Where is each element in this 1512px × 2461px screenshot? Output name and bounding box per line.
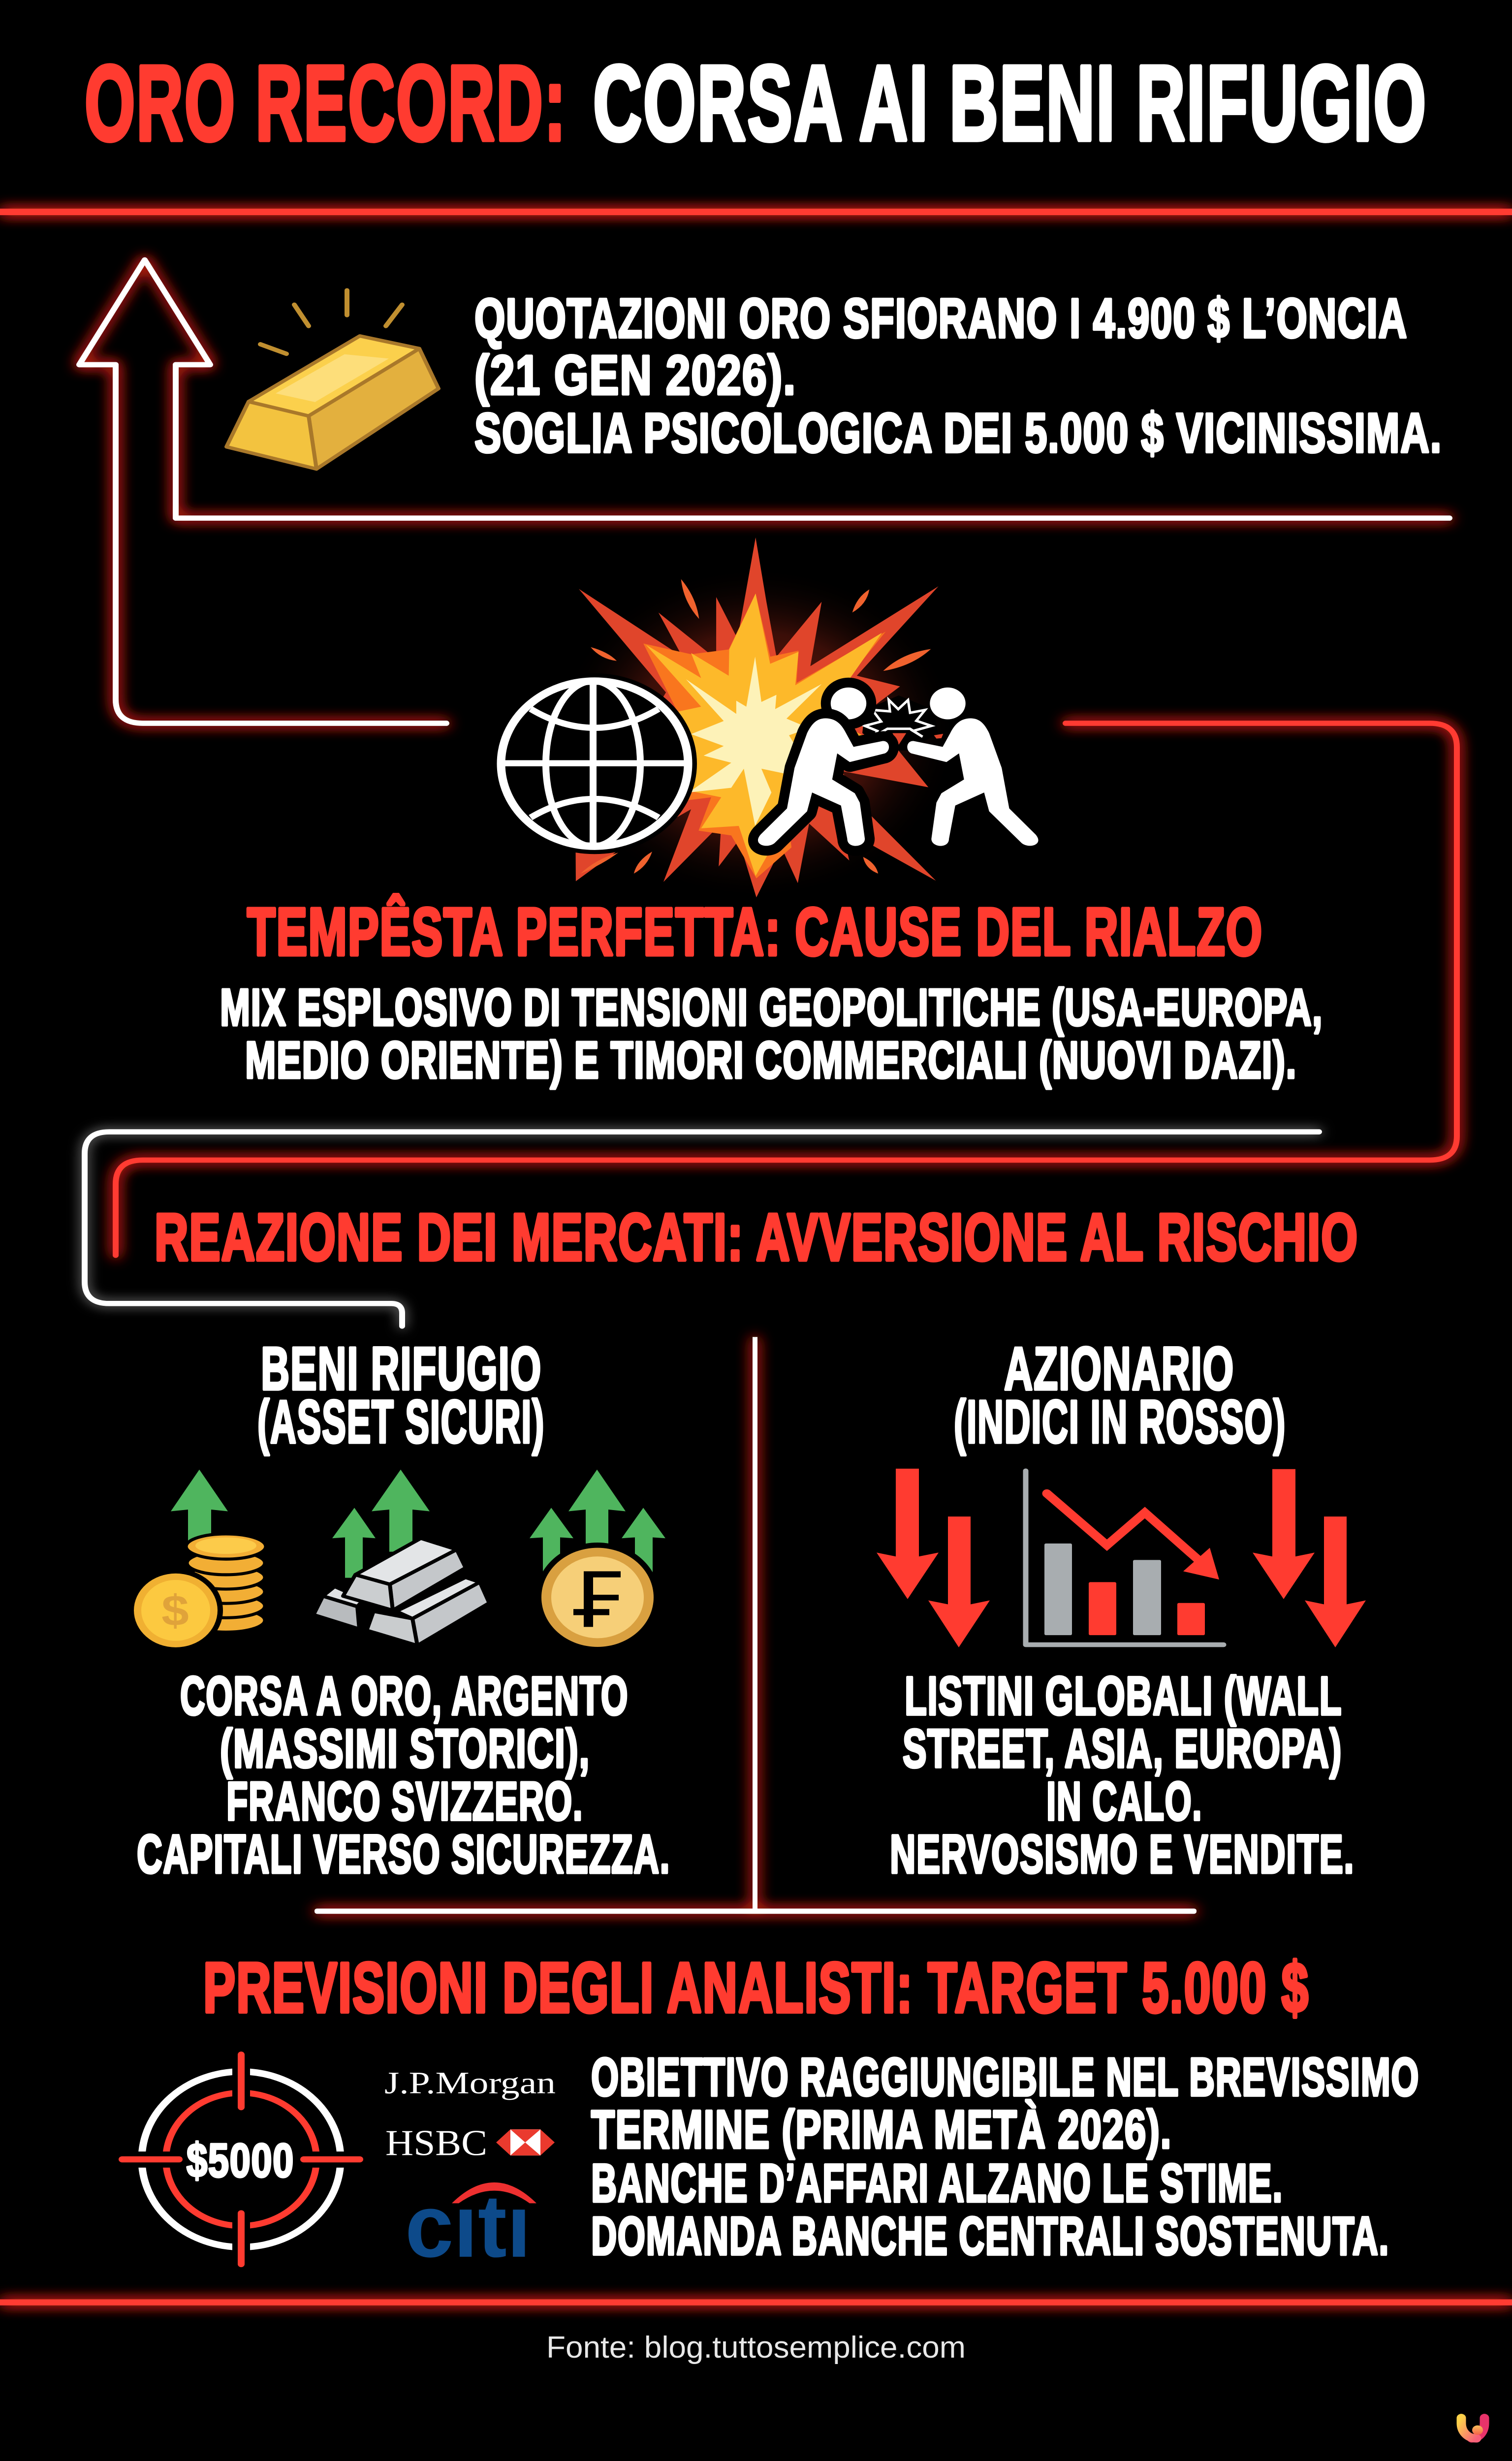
logo: HSBC: HSBC bbox=[385, 2123, 487, 2163]
divider: central T line bbox=[315, 1337, 1197, 1914]
text block: safe assets description: CORSA A ORO, ARGENTO bbox=[180, 1666, 629, 1726]
heading: beni rifugio: BENI RIFUGIO bbox=[261, 1334, 542, 1402]
text block: safe assets description: FRANCO SVIZZERO. bbox=[226, 1770, 583, 1831]
right figure bbox=[907, 688, 1039, 846]
heading: beni rifugio: (ASSET SICURI) bbox=[257, 1388, 545, 1455]
icon: gold coins: $ bbox=[161, 1586, 190, 1635]
text block: equities description: IN CALO. bbox=[1046, 1770, 1202, 1831]
left figure bbox=[758, 688, 889, 846]
text block: forecast details: TERMINE (PRIMA METÀ 2026). bbox=[591, 2099, 1172, 2160]
title: ORO RECORD: bbox=[85, 44, 567, 163]
text block: safe assets description: CAPITALI VERSO SICUREZZA. bbox=[137, 1824, 670, 1885]
panel: safe assets bbox=[128, 1334, 670, 1885]
icon: fighting figures bbox=[758, 688, 1039, 846]
heading: beni rifugio bbox=[257, 1334, 545, 1455]
text block: forecast details bbox=[591, 2047, 1419, 2266]
logo: HSBC bbox=[385, 2123, 555, 2163]
logo: citi: citi bbox=[405, 2176, 531, 2275]
text block: gold quotations bbox=[474, 287, 1442, 464]
arrow: red neon connector bbox=[116, 723, 1457, 1255]
logo: J.P.Morgan: J.P.Morgan bbox=[384, 2065, 556, 2100]
icon: gold coins bbox=[128, 1534, 266, 1652]
text block: safe assets description: (MASSIMI STORICI), bbox=[220, 1718, 590, 1779]
arrow: neon rising arrow path bbox=[79, 260, 1449, 723]
icon: red arrows down bbox=[877, 1469, 1366, 1647]
icon: explosion bbox=[556, 537, 957, 900]
arrow: white neon connector bbox=[85, 1132, 1319, 1326]
icon: globe bbox=[492, 673, 697, 854]
icon: silver bars bbox=[314, 1538, 489, 1645]
clash burst bbox=[865, 700, 931, 737]
text block: gold quotations: (21 GEN 2026). bbox=[474, 344, 796, 406]
text block: equities description bbox=[890, 1666, 1354, 1885]
icon: green arrows up bbox=[171, 1470, 665, 1578]
icon: target 5000: $5000 bbox=[187, 2134, 294, 2187]
logo: brand mark bbox=[1461, 2418, 1484, 2438]
text block: causes bbox=[220, 978, 1323, 1089]
chart: falling bars bbox=[1026, 1471, 1224, 1645]
heading: azionario: AZIONARIO bbox=[1004, 1334, 1234, 1402]
title bbox=[85, 44, 1427, 163]
heading: azionario bbox=[954, 1334, 1286, 1455]
icon: gold bar bbox=[226, 290, 439, 469]
icon: swiss franc coin bbox=[536, 1543, 660, 1652]
panel: equities bbox=[877, 1334, 1366, 1885]
text block: safe assets description bbox=[137, 1666, 670, 1885]
source note: Fonte: blog.tuttosemplice.com bbox=[546, 2330, 966, 2364]
icon: target 5000 bbox=[119, 2051, 363, 2267]
